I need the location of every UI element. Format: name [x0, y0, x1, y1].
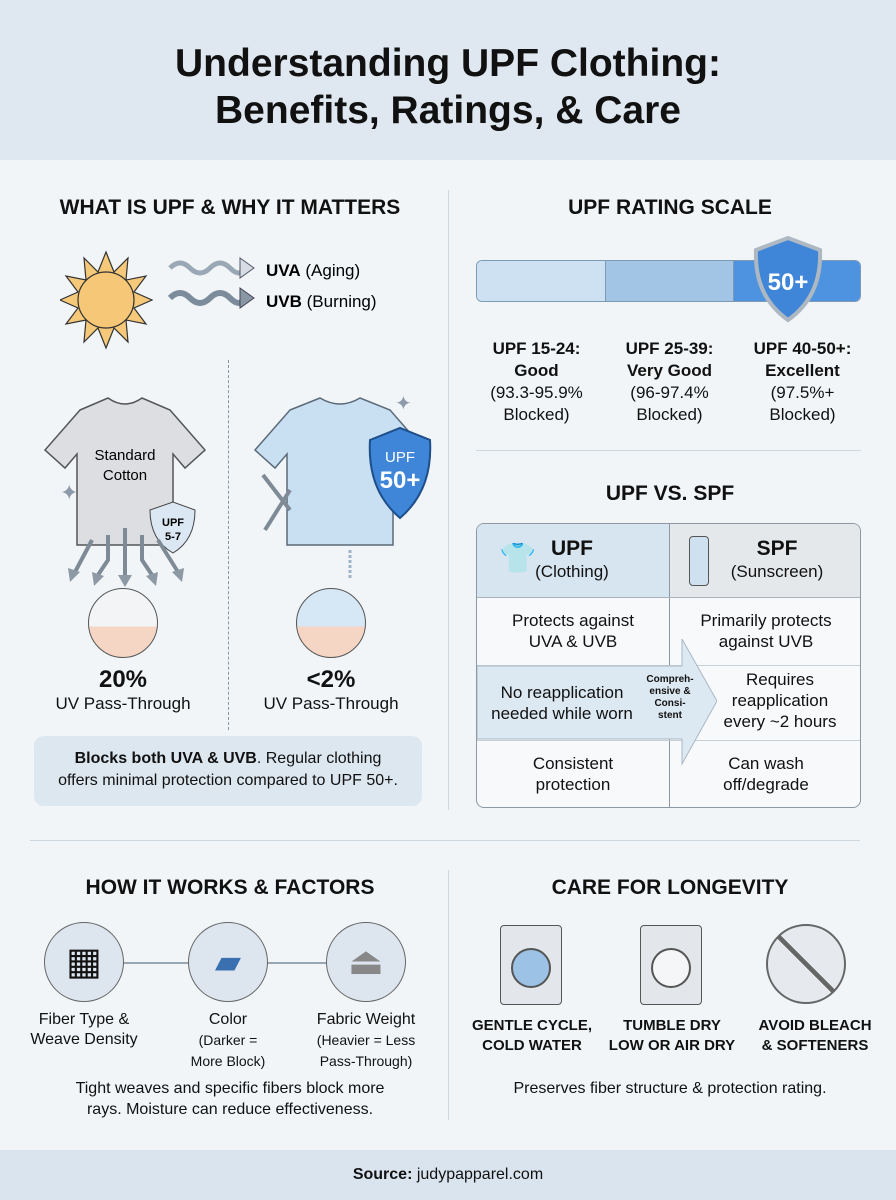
table: comparison: Primarily protects: [700, 611, 832, 630]
stat: 20%: 20%: [99, 666, 147, 693]
title: [175, 42, 721, 132]
labels: ratings: UPF 25-39:: [626, 339, 713, 358]
header band: [0, 0, 896, 160]
labels: factors: Weave Density: [30, 1031, 138, 1048]
icon: weight: [326, 922, 406, 1002]
labels: factors: Fiber Type &: [39, 1011, 129, 1028]
title: Understanding UPF Clothing:: [175, 42, 721, 85]
table: comparison: ensive &: [649, 686, 691, 697]
labels: ratings: (96-97.4%: [630, 383, 709, 402]
stat: <2%: UV Pass-Through: [263, 694, 399, 713]
table: comparison: (Sunscreen): [731, 562, 823, 581]
labels: ratings: [490, 339, 851, 424]
icon: weave: ▦: [66, 941, 102, 983]
labels: care: COLD WATER: [482, 1037, 582, 1054]
footer: source: [0, 1150, 896, 1200]
labels: ratings: UPF 40-50+:: [754, 339, 851, 358]
icon: weight: ⏏: [348, 941, 384, 983]
stat: <2%: <2%: [307, 666, 355, 693]
labels: care: GENTLE CYCLE,: [472, 1017, 592, 1034]
table: comparison: against UVB: [719, 632, 813, 651]
icon: UPF 50+ shirt: 50+: [380, 467, 420, 494]
title: Benefits, Ratings, & Care: [215, 89, 681, 132]
icon: UPF 50+ shirt: UPF: [385, 449, 415, 466]
panel: care: [472, 876, 872, 1097]
callout: blocks both: [34, 736, 422, 806]
icon: skin damaged: [88, 588, 158, 658]
labels: care: & SOFTENERS: [762, 1037, 868, 1054]
panel: how it works: Fabric Weight: [317, 1011, 415, 1028]
footer: source: Source: judypapparel.com: [353, 1166, 543, 1183]
icon: color swatch: [188, 922, 268, 1002]
panel: how it works: [30, 876, 416, 1118]
labels: ratings: Blocked): [769, 405, 836, 424]
table: comparison: UVA & UVB: [529, 632, 617, 651]
text: care note: Preserves fiber structure & protection rating.: [513, 1080, 827, 1097]
labels: care: AVOID BLEACH: [758, 1017, 872, 1034]
panel: UPF vs SPF: [476, 482, 861, 808]
labels: ratings: Blocked): [636, 405, 703, 424]
callout: blocks both: Blocks both UVA & UVB. Regular clothing offers minimal protection compared to UPF 50+.: [58, 750, 398, 789]
heading: upf vs spf: UPF VS. SPF: [606, 482, 734, 505]
text: factors note: rays. Moisture can reduce effectiveness.: [87, 1101, 373, 1118]
labels: care: LOW OR AIR DRY: [609, 1037, 735, 1054]
table: comparison: [476, 523, 861, 808]
heading: what is upf: WHAT IS UPF & WHY IT MATTERS: [60, 196, 400, 219]
labels: factors: [30, 1011, 138, 1048]
labels: ratings: UPF 15-24:: [493, 339, 580, 358]
table: comparison: every ~2 hours: [724, 712, 836, 731]
icon: 50+ shield: [754, 236, 822, 322]
icon: sun and rays: UVA (Aging): [266, 261, 360, 280]
icon: weave: [44, 922, 124, 1002]
text: factors note: Tight weaves and specific fibers block more: [76, 1080, 384, 1097]
labels: ratings: Very Good: [627, 361, 712, 380]
icon: standard cotton shirt: 5-7: [165, 531, 181, 543]
icon: no bleach: [766, 924, 846, 1004]
icon: UPF 50+ shirt: ✦: [395, 393, 412, 415]
labels: ratings: (97.5%+: [771, 383, 834, 402]
heading: care: CARE FOR LONGEVITY: [552, 876, 788, 899]
panel: rating scale: [476, 196, 861, 424]
heading: rating scale: UPF RATING SCALE: [568, 196, 772, 219]
icon: dryer: [640, 925, 702, 1005]
labels: ratings: (93.3-95.9%: [490, 383, 583, 402]
labels: ratings: Blocked): [503, 405, 570, 424]
panel: how it works: (Heavier = Less: [317, 1032, 415, 1048]
text: factors note: [76, 1080, 384, 1118]
stat: <2%: [263, 666, 399, 713]
table: comparison: protection: [536, 775, 610, 794]
icon: standard cotton shirt: Standard: [95, 447, 155, 464]
panel: how it works: More Block): [191, 1053, 265, 1069]
table: comparison: Compreh-: [646, 674, 694, 685]
icon: skin protected: [296, 588, 366, 658]
bar: rating scale: [476, 260, 861, 302]
table: comparison: Protects against: [512, 611, 634, 630]
icon: standard cotton shirt: UPF: [162, 517, 184, 529]
panel: how it works: (Darker =: [199, 1032, 257, 1048]
table: comparison: 👕: [499, 542, 536, 575]
table: comparison: (Clothing): [535, 562, 609, 581]
icon: standard cotton shirt: [44, 397, 206, 587]
labels: ratings: Excellent: [765, 361, 840, 380]
arrow: comprehensive: [477, 639, 717, 766]
icon: 50+ shield: 50+: [768, 269, 808, 296]
table: comparison: No reapplication needed while worn: [491, 683, 633, 723]
table: comparison: Can wash: [728, 754, 804, 773]
labels: care: [472, 1017, 872, 1054]
panel: how it works: Color: [209, 1011, 247, 1028]
table: comparison: Consi-: [654, 698, 686, 709]
stat: 20%: [55, 666, 191, 713]
table: comparison: stent: [658, 710, 682, 721]
table: comparison: UPF: [551, 537, 593, 560]
table: comparison: SPF: [757, 537, 797, 560]
panel: what is UPF: [34, 196, 432, 806]
icon: color swatch: ▰: [215, 943, 241, 981]
table: comparison: Requires: [746, 670, 814, 689]
icon: standard cotton shirt: Cotton: [103, 467, 147, 484]
panel: how it works: Pass-Through): [320, 1053, 412, 1069]
table: comparison: reapplication: [732, 691, 828, 710]
labels: ratings: Good: [514, 361, 559, 380]
table: comparison: off/degrade: [723, 775, 809, 794]
icon: washer: [500, 925, 562, 1005]
table: comparison: Consistent: [533, 754, 613, 773]
icon: UPF 50+ shirt: [254, 393, 432, 578]
icon: sun and rays: UVB (Burning): [266, 292, 377, 311]
stat: 20%: UV Pass-Through: [55, 694, 191, 713]
icon: sun and rays: [60, 250, 377, 350]
labels: care: TUMBLE DRY: [623, 1017, 721, 1034]
icon: standard cotton shirt: ✦: [60, 480, 78, 505]
heading: how it works: HOW IT WORKS & FACTORS: [86, 876, 374, 899]
